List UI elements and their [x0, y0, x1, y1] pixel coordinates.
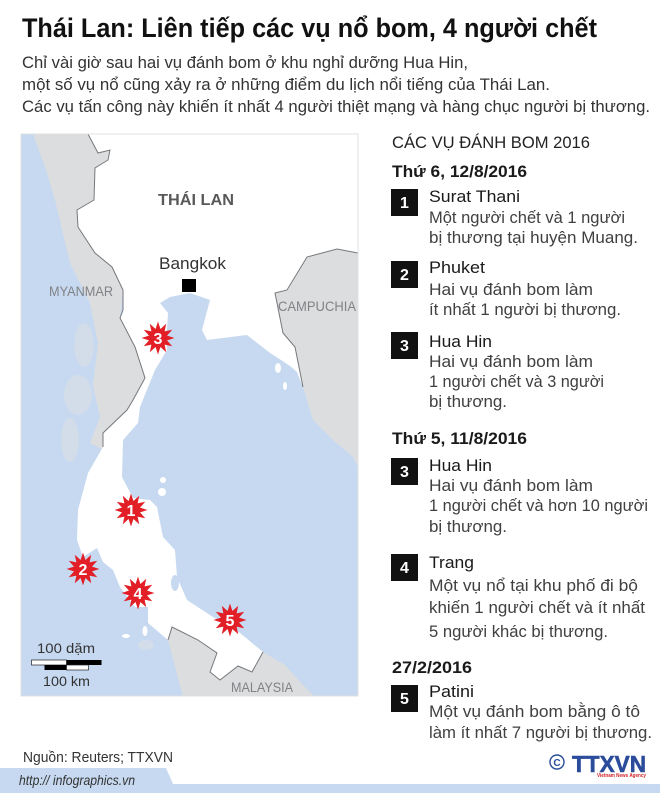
item: Phuket: 2 [400, 267, 409, 284]
item: Trang: khiến 1 người chết và ít nhất [429, 598, 645, 617]
islands and lakes [122, 363, 287, 638]
footer url: http:// infographics.vn [19, 772, 135, 788]
item: Phuket: ít nhất 1 người bị thương. [429, 300, 621, 319]
item: Patini: làm ít nhất 7 người bị thương. [429, 723, 652, 742]
icon: blast marker 2 [68, 554, 98, 584]
item: Hua Hin (12/8): Hua Hin [429, 332, 492, 351]
logo: TTXVN: TTXVN [572, 751, 646, 777]
intro text [22, 53, 650, 116]
item: Surat Thani: 1 [400, 195, 409, 212]
city label: Bangkok: Bangkok [159, 254, 226, 273]
country label: Myanmar: MYANMAR [49, 283, 113, 299]
intro text: Các vụ tấn công này khiến ít nhất 4 người thiệt mạng và hàng chục người bị thương. [22, 97, 650, 116]
title: Thái Lan: Liên tiếp các vụ nổ bom, 4 người chết [22, 13, 597, 43]
scale bar [32, 640, 102, 689]
icon: blast marker 4 [123, 578, 153, 608]
icon: blast marker 5 [215, 605, 245, 635]
icon: blast marker 1 [116, 495, 146, 525]
date heading: 12/8/2016: Thứ 6, 12/8/2016 [392, 162, 527, 181]
item: Patini: 5 [400, 691, 409, 708]
icon: blast marker 1: 1 [127, 503, 136, 520]
icon: blast marker 4: 4 [134, 586, 143, 603]
footer band [0, 768, 660, 793]
icon: blast marker 2: 2 [79, 562, 88, 579]
land: Malaysia [168, 627, 315, 697]
coastal shallows and archipelago [61, 323, 154, 650]
item: Hua Hin (11/8): Hai vụ đánh bom làm [429, 476, 593, 495]
scale bar: 100 km [43, 673, 90, 689]
item: Phuket: Phuket [429, 258, 485, 277]
item: Patini: Patini [429, 682, 474, 701]
land: Cambodia [275, 249, 358, 467]
land: Myanmar [33, 134, 145, 450]
item: Trang [391, 553, 645, 641]
icon: blast marker 5: 5 [226, 613, 235, 630]
item: Patini [391, 682, 652, 742]
item: Trang: Trang [429, 553, 474, 572]
item: Hua Hin (11/8): 1 người chết và hơn 10 người [429, 496, 648, 515]
item: Hua Hin (12/8): bị thương. [429, 392, 507, 411]
item: Hua Hin (11/8): Hua Hin [429, 456, 492, 475]
item: Hua Hin (12/8): 3 [400, 338, 409, 355]
icon: blast marker 3 [143, 323, 173, 353]
country label: Cambodia: CAMPUCHIA [278, 298, 357, 314]
item: Trang: Một vụ nổ tại khu phố đi bộ [429, 576, 638, 595]
item: Patini: Một vụ đánh bom bằng ô tô [429, 702, 640, 721]
intro text: một số vụ nổ cũng xảy ra ở những điểm du lịch nổi tiếng của Thái Lan. [22, 75, 550, 94]
item: Surat Thani: bị thương tại huyện Muang. [429, 228, 638, 247]
item: Surat Thani: Một người chết và 1 người [429, 208, 625, 227]
item: Hua Hin (11/8): 3 [400, 464, 409, 481]
source note: Nguồn: Reuters; TTXVN [23, 749, 173, 766]
logo: TTXVN: C [553, 758, 561, 769]
item: Hua Hin (12/8): 1 người chết và 3 người [429, 372, 604, 391]
item: Surat Thani: Surat Thani [429, 187, 520, 206]
land: Thailand [77, 134, 358, 680]
icon: Bangkok marker [182, 279, 196, 292]
land borders [77, 134, 358, 680]
item: Phuket: Hai vụ đánh bom làm [429, 280, 593, 299]
intro text: Chỉ vài giờ sau hai vụ đánh bom ở khu nghỉ dưỡng Hua Hin, [22, 53, 468, 72]
panel: map of Thailand [21, 134, 358, 697]
country label: Thailand: THÁI LAN [158, 190, 234, 209]
item: Phuket [391, 258, 621, 319]
item: Trang: 4 [400, 560, 409, 577]
date heading: 11/8/2016: Thứ 5, 11/8/2016 [392, 429, 527, 448]
item: Surat Thani [391, 187, 638, 247]
date heading: 27/2/2016: 27/2/2016 [392, 658, 472, 677]
item: Hua Hin (11/8) [391, 456, 648, 536]
item: Hua Hin (12/8): Hai vụ đánh bom làm [429, 352, 593, 371]
logo: TTXVN: Vietnam News Agency [597, 773, 646, 779]
item: Trang: 5 người khác bị thương. [429, 622, 608, 641]
item: Hua Hin (12/8) [391, 332, 604, 411]
item: Hua Hin (11/8): bị thương. [429, 517, 507, 536]
icon: blast marker 3: 3 [154, 331, 163, 348]
panel: list heading: CÁC VỤ ĐÁNH BOM 2016 [392, 133, 590, 152]
country label: Malaysia: MALAYSIA [231, 679, 294, 695]
scale bar: 100 dặm [37, 640, 95, 656]
